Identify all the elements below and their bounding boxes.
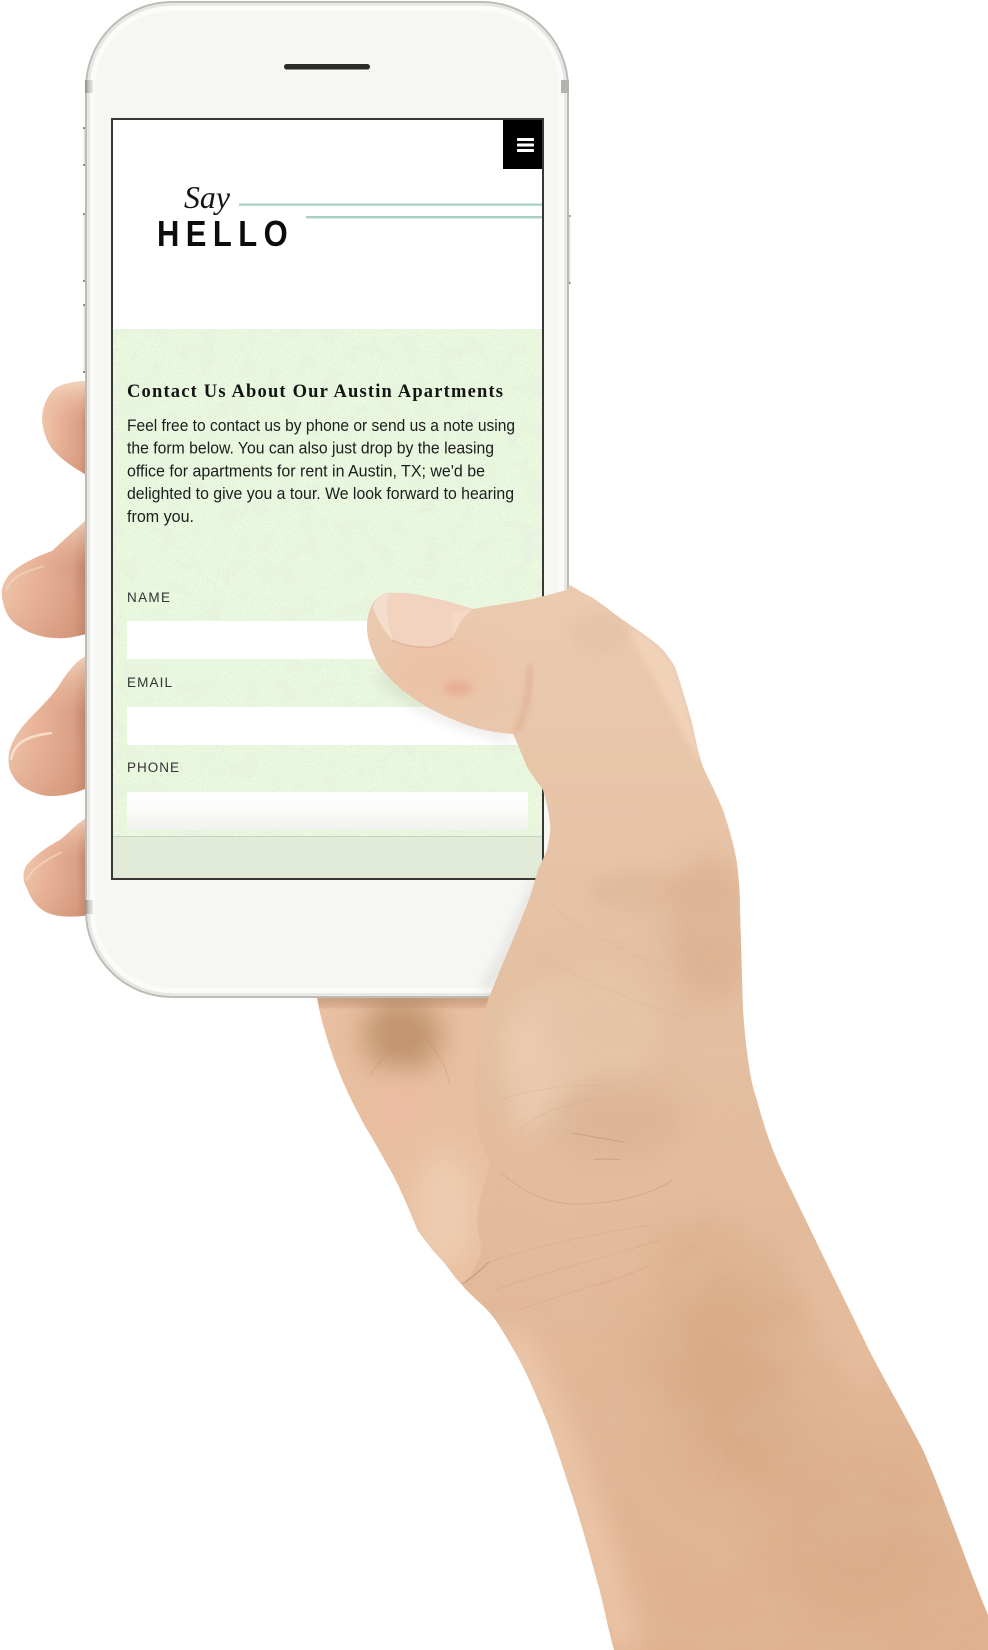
middle finger	[2, 517, 90, 638]
form field: phone	[127, 760, 528, 830]
thumbnail	[373, 593, 472, 647]
fingers behind the phone	[2, 381, 90, 917]
title: HELLO	[157, 215, 288, 255]
speaker	[284, 64, 370, 70]
section heading: Contact Us About Our Austin Apartments	[127, 382, 503, 402]
skin base shape	[367, 585, 988, 1650]
title	[159, 187, 286, 246]
form field: name	[127, 592, 376, 659]
green form panel	[113, 329, 542, 837]
decorative title rules	[239, 204, 542, 218]
ring finger	[9, 654, 90, 796]
body paragraph: from you.	[127, 507, 194, 526]
phone body	[86, 2, 568, 997]
thumb, hand and forearm	[360, 585, 988, 1650]
title: Say	[184, 179, 231, 215]
body paragraph	[127, 416, 515, 526]
palm behind the phone	[317, 998, 489, 1286]
footer bar	[113, 836, 542, 878]
shadow of the hand on the phone	[380, 672, 540, 992]
skin shading	[442, 634, 962, 1650]
form field: name: NAME	[127, 590, 170, 605]
body paragraph: office for apartments for rent in Austin, TX; we'd be	[127, 462, 485, 480]
screen	[112, 119, 543, 879]
form field: email: EMAIL	[127, 675, 172, 690]
antenna bands	[85, 80, 93, 914]
body paragraph: the form below. You can also just drop by the leasing	[127, 439, 494, 458]
skin creases	[462, 900, 690, 1310]
phone	[83, 2, 570, 997]
form field: email	[127, 675, 528, 745]
side buttons	[83, 128, 570, 373]
body paragraph: Feel free to contact us by phone or send us a note using	[127, 416, 515, 435]
form field: phone: PHONE	[127, 760, 179, 775]
body paragraph: delighted to give you a tour. We look forward to hearing	[127, 484, 514, 503]
menu button	[503, 119, 543, 169]
index finger	[42, 381, 90, 477]
little finger	[23, 816, 90, 917]
